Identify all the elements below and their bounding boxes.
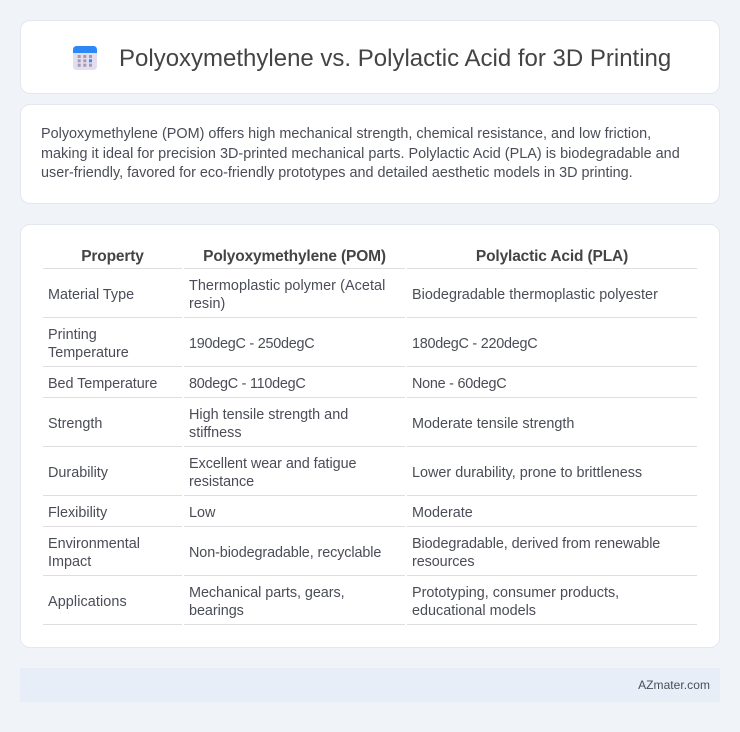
comparison table: Polyoxymethylene (POM)	[203, 248, 386, 265]
comparison table: Mechanical parts, gears,	[189, 585, 345, 601]
footer source text: AZmater.com	[638, 678, 710, 692]
intro paragraph: user-friendly, favored for eco-friendly prototypes and detailed aesthetic models in 3D printing.	[41, 165, 633, 181]
row: flexibility	[43, 505, 697, 527]
row: environmental impact	[43, 536, 697, 576]
comparison table: Property	[81, 248, 144, 265]
icon: calendar	[73, 46, 97, 70]
table panel	[20, 224, 720, 648]
comparison table: 80degC - 110degC	[189, 376, 306, 392]
intro text panel	[20, 104, 720, 204]
comparison table: Durability	[48, 465, 108, 481]
comparison table: 190degC - 250degC	[189, 336, 314, 352]
comparison table: Biodegradable, derived from renewable	[412, 536, 660, 552]
comparison table: Bed Temperature	[48, 376, 157, 392]
header panel	[20, 20, 720, 94]
comparison table: Impact	[48, 554, 91, 570]
row: strength	[43, 407, 697, 447]
footer bar	[20, 668, 720, 702]
comparison table: Applications	[48, 594, 127, 610]
table header row	[43, 248, 697, 269]
comparison table: High tensile strength and	[189, 407, 348, 423]
comparison table: stiffness	[189, 425, 242, 441]
row: bed temperature	[43, 376, 697, 398]
comparison table: bearings	[189, 603, 244, 619]
intro paragraph: making it ideal for precision 3D-printed mechanical parts. Polylactic Acid (PLA) is biodegradable and	[41, 146, 680, 162]
intro paragraph: Polyoxymethylene (POM) offers high mechanical strength, chemical resistance, and low friction,	[41, 126, 651, 142]
comparison table: resin)	[189, 296, 225, 312]
row: material type	[43, 278, 697, 318]
comparison table: Thermoplastic polymer (Acetal	[189, 278, 385, 294]
comparison table: Moderate tensile strength	[412, 416, 574, 432]
comparison table: Strength	[48, 416, 102, 432]
comparison table: None - 60degC	[412, 376, 506, 392]
comparison table: Prototyping, consumer products,	[412, 585, 619, 601]
title: Polyoxymethylene vs. Polylactic Acid for 3D Printing	[119, 45, 671, 72]
comparison table: Printing	[48, 327, 97, 343]
row: applications	[43, 585, 697, 625]
comparison table: resistance	[189, 474, 254, 490]
comparison table	[43, 248, 697, 625]
comparison table: Biodegradable thermoplastic polyester	[412, 287, 658, 303]
comparison table: Non-biodegradable, recyclable	[189, 545, 381, 561]
comparison table: Environmental	[48, 536, 140, 552]
row: durability	[43, 456, 697, 496]
comparison table: educational models	[412, 603, 536, 619]
comparison table: Moderate	[412, 505, 473, 521]
comparison table: 180degC - 220degC	[412, 336, 537, 352]
comparison table: Excellent wear and fatigue	[189, 456, 356, 472]
comparison table: resources	[412, 554, 474, 570]
row: printing temperature	[43, 327, 697, 367]
comparison table: Lower durability, prone to brittleness	[412, 465, 642, 481]
comparison table: Flexibility	[48, 505, 107, 521]
comparison table: Material Type	[48, 287, 134, 303]
intro paragraph	[41, 126, 680, 181]
comparison table: Polylactic Acid (PLA)	[476, 248, 628, 265]
comparison table: Temperature	[48, 345, 129, 361]
comparison table: Low	[189, 505, 215, 521]
